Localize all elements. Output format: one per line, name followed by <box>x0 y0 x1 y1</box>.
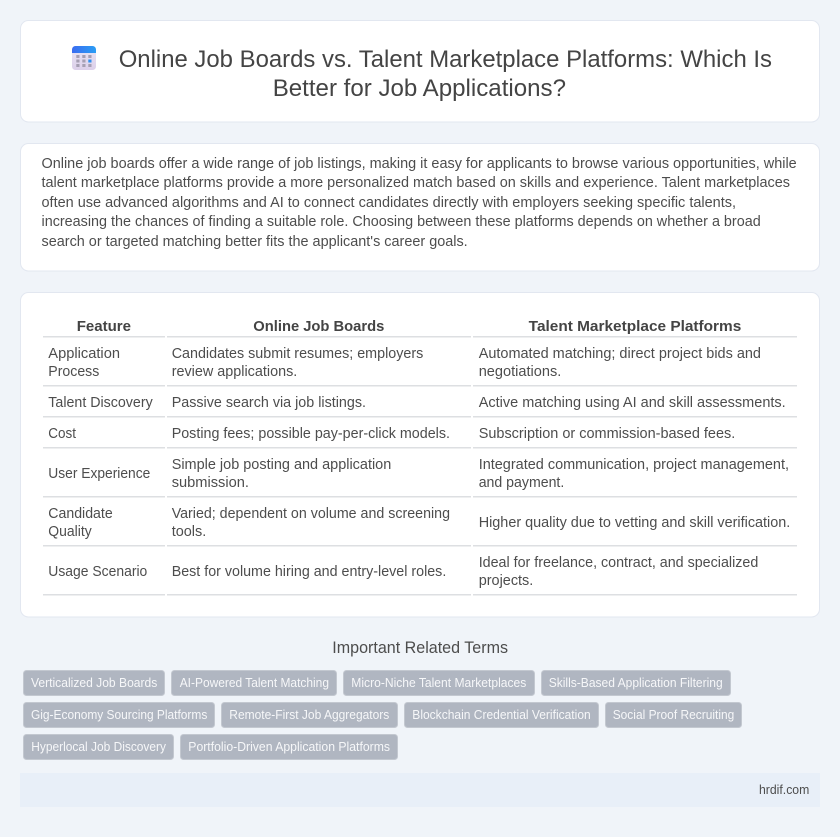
tag <box>542 670 730 696</box>
tag <box>24 702 214 728</box>
row: user experience: submission. <box>172 475 249 491</box>
row: application process: Process <box>48 364 99 380</box>
tag: Social Proof Recruiting <box>613 708 734 722</box>
row: candidate quality: Varied; dependent on volume and screening <box>172 506 450 522</box>
row: cost: Subscription or commission-based fees. <box>479 426 735 442</box>
tag <box>606 702 742 728</box>
row: cost <box>48 426 735 442</box>
tag: Portfolio-Driven Application Platforms <box>188 740 390 754</box>
panel: header <box>20 20 820 122</box>
tag: Hyperlocal Job Discovery <box>31 740 167 754</box>
tag <box>172 670 336 696</box>
row: application process: Automated matching; direct project bids and <box>479 346 761 362</box>
row: cost: Posting fees; possible pay-per-click models. <box>172 426 450 442</box>
tag <box>222 702 398 728</box>
row: application process: Candidates submit resumes; employers <box>172 346 423 362</box>
title: Better for Job Applications? <box>273 75 566 102</box>
tag: Verticalized Job Boards <box>31 676 157 690</box>
row: candidate quality: Higher quality due to vetting and skill verification. <box>479 515 790 531</box>
row: user experience: Integrated communication, project management, <box>479 457 789 473</box>
row: application process: Application <box>48 346 120 362</box>
tag <box>24 670 164 696</box>
footer source: hrdif.com <box>759 783 809 797</box>
tag <box>344 670 534 696</box>
row: application process: review applications. <box>172 364 297 380</box>
row: application process: negotiations. <box>479 364 561 380</box>
title: Online Job Boards vs. Talent Marketplace Platforms: Which Is <box>119 46 772 73</box>
tag <box>180 734 398 760</box>
tag: Remote-First Job Aggregators <box>229 708 389 722</box>
row: user experience: and payment. <box>479 475 564 491</box>
tag: AI-Powered Talent Matching <box>180 676 329 690</box>
table header row: Feature <box>77 318 131 335</box>
row: cost: Cost <box>48 426 76 442</box>
tag: Micro-Niche Talent Marketplaces <box>351 676 526 690</box>
tag: Blockchain Credential Verification <box>412 708 591 722</box>
intro paragraph: increasing the chances of finding a suitable role. Choosing between these platforms depends on whether a broad <box>42 214 761 230</box>
tag: Skills-Based Application Filtering <box>549 676 723 690</box>
table header row <box>77 318 741 335</box>
row: usage scenario <box>48 555 758 589</box>
row: user experience <box>48 457 789 491</box>
table header row: Talent Marketplace Platforms <box>529 318 741 335</box>
panel: comparison table <box>20 292 820 617</box>
row: user experience: Simple job posting and application <box>172 457 391 473</box>
row: user experience: User Experience <box>48 466 150 482</box>
row: talent discovery <box>48 395 786 411</box>
row: usage scenario: Best for volume hiring and entry-level roles. <box>172 564 446 580</box>
tag: Gig-Economy Sourcing Platforms <box>31 708 207 722</box>
intro paragraph: often use advanced algorithms and AI to connect candidates directly with employers seeking specific talents, <box>42 195 736 211</box>
intro paragraph: search or targeted matching better fits the applicant's career goals. <box>42 234 468 250</box>
intro paragraph: Online job boards offer a wide range of job listings, making it easy for applicants to browse various opportunities, while <box>42 156 797 172</box>
icon: calendar <box>72 46 96 70</box>
tag list <box>24 670 742 760</box>
row: talent discovery: Passive search via job listings. <box>172 395 366 411</box>
row: candidate quality: Quality <box>48 524 92 540</box>
row: application process <box>48 346 761 380</box>
table header row: Online Job Boards <box>253 318 384 335</box>
panel: intro text <box>20 144 820 271</box>
row: candidate quality: tools. <box>172 524 206 540</box>
row: candidate quality <box>48 506 790 540</box>
tag <box>24 734 174 760</box>
row: usage scenario: projects. <box>479 573 533 589</box>
row: usage scenario: Ideal for freelance, contract, and specialized <box>479 555 758 571</box>
tag <box>404 702 598 728</box>
row: talent discovery: Active matching using AI and skill assessments. <box>479 395 786 411</box>
footer <box>20 773 820 807</box>
row: usage scenario: Usage Scenario <box>48 564 147 580</box>
title <box>119 46 772 102</box>
heading: important related terms: Important Related Terms <box>332 639 508 657</box>
intro paragraph <box>42 156 797 250</box>
row: talent discovery: Talent Discovery <box>48 395 153 411</box>
intro paragraph: talent marketplace platforms provide a more personalized match based on skills and experience. Talent marketplaces <box>42 175 790 191</box>
row: candidate quality: Candidate <box>48 506 113 522</box>
